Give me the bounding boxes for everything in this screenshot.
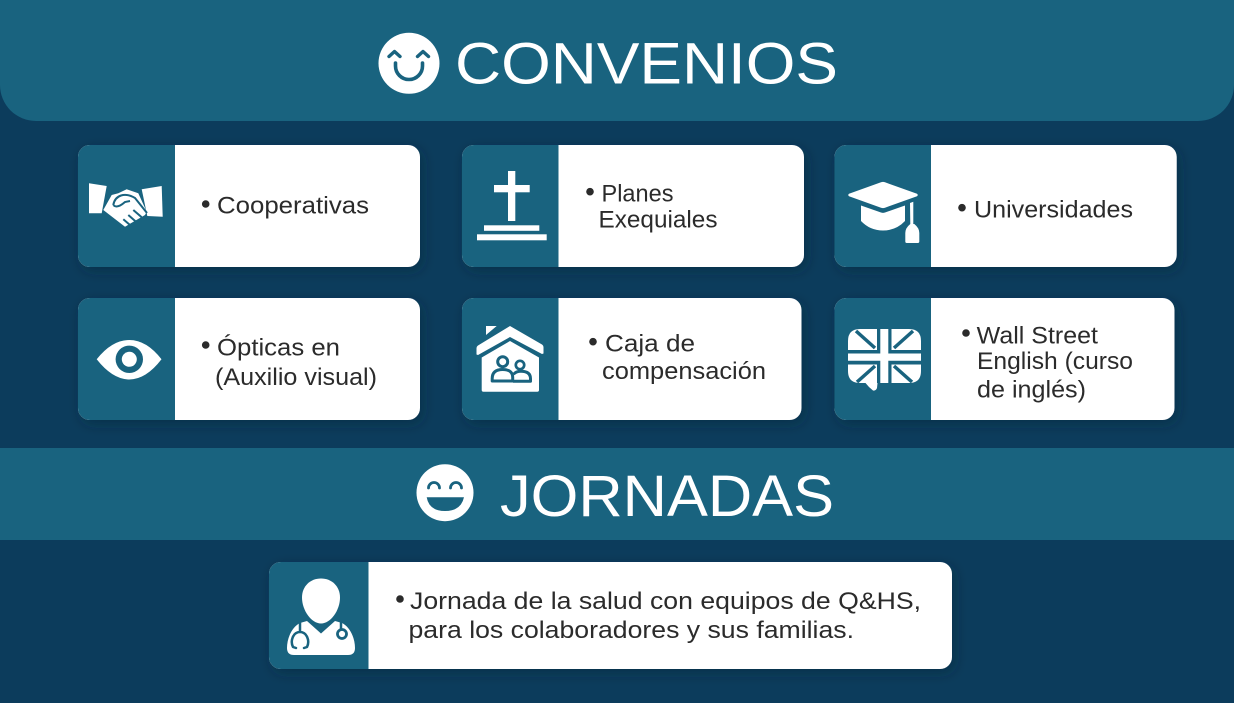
icon: cross <box>477 171 547 240</box>
text: jornada de la salud: para los colaboradores y sus familias. <box>408 617 854 644</box>
text: jornada de la salud: Jornada de la salud con equipos de Q&HS, <box>410 588 921 615</box>
heading: convenios: CONVENIOS <box>455 32 838 96</box>
card: wall street english <box>834 298 1174 420</box>
card: opticas <box>78 298 420 420</box>
card: jornada de la salud <box>269 562 952 669</box>
icon: eye <box>97 340 162 380</box>
text: cooperativas: Cooperativas <box>217 192 369 220</box>
text: wall street english <box>962 322 1133 404</box>
icon: smiling face <box>378 33 440 94</box>
icon: speech bubble with british flag <box>848 329 921 391</box>
text: planes exequiales: Planes <box>602 181 674 208</box>
icon: house with family <box>476 326 544 392</box>
text: caja de compensacion <box>589 331 766 385</box>
header band: jornadas <box>0 448 1234 540</box>
text: opticas: Ópticas en <box>217 334 340 362</box>
text: caja de compensacion: compensación <box>602 358 766 385</box>
card: cooperativas <box>78 145 420 267</box>
text: opticas: (Auxilio visual) <box>215 364 377 391</box>
header band: convenios <box>0 0 1234 121</box>
text: opticas <box>202 334 377 391</box>
text: wall street english: de inglés) <box>977 377 1086 404</box>
text: wall street english: English (curso <box>977 348 1133 375</box>
card: caja de compensacion <box>462 298 802 420</box>
heading: jornadas: JORNADAS <box>500 464 834 529</box>
text: universidades: Universidades <box>974 197 1133 224</box>
text: planes exequiales: Exequiales <box>598 206 718 234</box>
icon: laughing face <box>416 464 474 521</box>
icon: doctor with stethoscope <box>287 578 355 655</box>
icon: graduation cap <box>848 182 919 243</box>
icon: handshake <box>89 183 163 227</box>
text: jornada de la salud <box>396 588 921 644</box>
card: universidades <box>834 145 1177 267</box>
text: planes exequiales <box>586 181 718 234</box>
text: caja de compensacion: Caja de <box>605 331 695 358</box>
card: planes exequiales <box>462 145 804 267</box>
text: wall street english: Wall Street <box>977 322 1098 349</box>
